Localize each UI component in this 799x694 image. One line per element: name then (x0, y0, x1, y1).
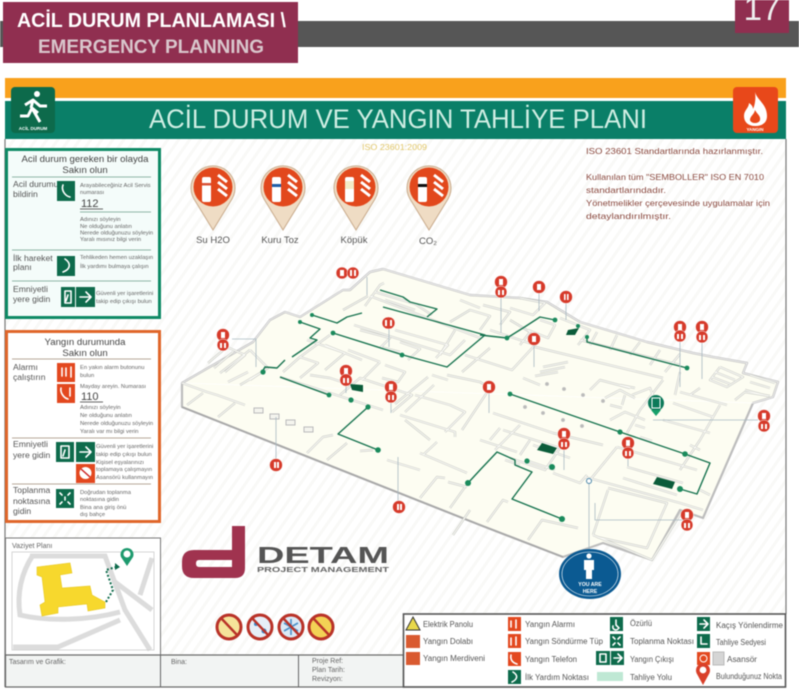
step: raise alarm: Ne olduğunu anlatın (80, 413, 132, 419)
step: report emergency: Acil durumu (13, 179, 59, 189)
step: go to safety (13, 284, 153, 307)
page number (735, 0, 789, 33)
step: raise alarm: Yaralı var mı bilgi verin (80, 429, 139, 435)
legend column 4: Bulunduğunuz Nokta (716, 672, 782, 681)
header title block (3, 2, 298, 63)
title block (6, 655, 404, 687)
step: raise alarm: bulun (80, 373, 94, 379)
you are here marker: YOU ARE (578, 582, 602, 588)
step: first response (13, 253, 153, 276)
step: go to safety: yere gidin (13, 294, 50, 304)
step: assembly point: gidin (13, 506, 31, 516)
step: go to safety: Güvenli yer işaretlerini (96, 444, 153, 450)
icon: emergency exit runner (11, 87, 55, 133)
step: first response: İlk hareket (13, 253, 53, 263)
route to assembly (106, 567, 116, 602)
step: assembly point: Toplanma (13, 485, 50, 495)
legend column 4: Tahliye Sedyesi (716, 638, 766, 647)
extinguisher pin: water (191, 166, 235, 246)
step: go to safety: Emniyetli (13, 284, 48, 294)
divider (12, 177, 151, 281)
you are here marker: HERE (583, 589, 598, 595)
prohibition signs (217, 615, 333, 639)
header title block: EMERGENCY PLANNING (38, 37, 264, 58)
marker leader lines (232, 277, 758, 550)
standards note: Yönetmelikler çerçevesinde uygulamalar için (586, 199, 770, 208)
step: go to safety: Asansörü kullanmayın (96, 475, 153, 481)
legend column 3: Özürlü (630, 619, 652, 628)
step: raise alarm: çalıştırın (13, 372, 46, 382)
assembly pin (120, 548, 133, 566)
green title band (5, 101, 786, 139)
step: report emergency: Nerede olduğunuzu söyleyin (80, 230, 153, 236)
evacuation routes (260, 290, 710, 522)
legend column 1: Elektrik Panolu (423, 620, 473, 629)
you are here marker (559, 478, 621, 599)
step: report emergency: Arayabileceğiniz Acil Servis (80, 183, 151, 189)
main building (37, 563, 105, 616)
divider (12, 359, 151, 484)
title block: Proje Ref: (312, 658, 343, 665)
emergency heading: Sakın olun (62, 165, 108, 176)
legend column 2: Yangın Söndürme Tüp (525, 637, 604, 646)
legend column 1: Yangın Dolabı (423, 637, 473, 646)
legend column 1 (406, 617, 485, 665)
step: report emergency (13, 179, 153, 243)
fire heading: Yangın durumunda (45, 337, 126, 348)
step: first response: İlk yardımı bulmaya çalışın (80, 263, 149, 270)
step: report emergency: 112 (81, 198, 99, 210)
building outline (182, 269, 778, 560)
step: assembly point: Doğrudan toplanma (80, 490, 132, 496)
step: go to safety: toplamaya çalışmayın (96, 467, 152, 473)
legend column 2 (508, 617, 604, 684)
title block: Plan Tarih: (312, 667, 345, 674)
step: report emergency: Yaralı mısınız bilgi verin (80, 237, 141, 243)
fire markers (216, 267, 770, 531)
legend column 3: Tahliye Yolu (630, 673, 672, 682)
panel: site plan (6, 538, 160, 655)
step: assembly point: dış bahçe (80, 512, 105, 518)
exit marker (648, 395, 664, 416)
logo: DETAM: PROJECT MANAGEMENT (257, 565, 389, 574)
extinguisher pin: water: Su H2O (196, 235, 230, 246)
title block: Revizyon: (312, 676, 343, 683)
legend column 3 (596, 617, 694, 682)
title block: Tasarım ve Grafik: (9, 659, 66, 666)
extinguisher pin: dry powder (261, 166, 305, 246)
floor plan (182, 267, 778, 560)
dark green zones (350, 328, 675, 489)
step: raise alarm: Adınızı söyleyin (80, 405, 121, 411)
page header bar (0, 21, 799, 47)
orange band (5, 78, 786, 98)
legend column 3: Toplanma Noktası (630, 637, 694, 646)
fire heading: Sakın olun (62, 348, 108, 359)
step: assembly point: noktasına (13, 496, 50, 506)
emergency heading (22, 154, 149, 176)
legend column 4: Asansör (727, 655, 757, 664)
step: report emergency: numarası (80, 190, 105, 196)
standards note: standartlarındadır. (586, 186, 666, 195)
icon: fire (733, 87, 778, 133)
step: raise alarm (13, 362, 153, 435)
fire heading (45, 337, 126, 359)
step: go to safety: Güvenli yer işaretlerini (96, 291, 153, 297)
icon: emergency exit runner: ACİL DURUM (19, 125, 47, 131)
logo: DETAM: DETAM (257, 542, 389, 568)
extinguisher pin: CO2 (407, 166, 451, 247)
step: raise alarm: Nerede olduğunuzu söyleyin (80, 421, 153, 427)
legend column 4: Kaçış Yönlendirme (716, 621, 784, 630)
extinguisher pin: foam: Köpük (341, 235, 368, 246)
step: go to safety: Kişisel eşyalarınızı (96, 460, 144, 466)
title block: Bina: (171, 659, 187, 666)
panel: fire instructions (6, 332, 160, 522)
step: raise alarm: En yakın alarm butonunu (80, 365, 144, 371)
panel: emergency instructions (6, 150, 160, 318)
step: go to safety: Emniyetli (13, 439, 48, 449)
standards note: ISO 23601 Standartlarında hazırlanmıştır. (586, 147, 763, 156)
step: go to safety: takip edip çıkışı bulun (96, 299, 152, 305)
interior walls (182, 283, 775, 560)
columns (254, 383, 604, 432)
standard code: ISO 23601:2009 (362, 143, 428, 152)
standards note: Kullanılan tüm "SEMBOLLER" ISO EN 7010 (586, 173, 764, 182)
header title block: ACİL DURUM PLANLAMASI \ (17, 9, 286, 32)
step: report emergency: Adınızı söyleyin (80, 217, 121, 223)
legend column 1: Yangın Merdiveni (423, 654, 485, 663)
step: report emergency: Ne olduğunu anlatın (80, 224, 132, 230)
poster title: ACİL DURUM VE YANGIN TAHLİYE PLANI (149, 103, 647, 134)
emergency heading: Acil durum gereken bir olayda (22, 154, 149, 165)
site plan label: Vaziyet Planı (12, 543, 52, 550)
step: go to safety (13, 439, 153, 483)
step: report emergency: bildirin (13, 189, 38, 199)
legend (404, 614, 786, 687)
marker glyphs (220, 270, 767, 528)
extinguisher pin: dry powder: Kuru Toz (261, 235, 299, 246)
step: raise alarm: Alarmı (13, 362, 38, 372)
extinguisher pin: CO2: CO₂ (419, 236, 437, 247)
step: first response: planı (13, 262, 32, 272)
site map roads (13, 555, 152, 650)
step: go to safety: yere gidin (13, 450, 50, 460)
legend column 3: Yangın Çıkışı (630, 655, 674, 664)
standards note (586, 147, 770, 221)
step: raise alarm: 110 (81, 391, 99, 403)
logo: DETAM (182, 526, 389, 578)
step: raise alarm: Mayday areyin. Numarası (80, 384, 146, 390)
legend column 2: Yangın Alarmı (525, 620, 575, 629)
legend column 4 (696, 617, 784, 685)
icon: fire: YANGIN (746, 127, 764, 132)
step: go to safety: takip edip çıkışı bulun (96, 452, 152, 458)
step: first response: Tehlikeden hemen uzaklaşın (80, 255, 153, 261)
legend column 2: Yangın Telefon (525, 655, 577, 664)
standards note: detaylandırılmıştır. (586, 212, 671, 221)
step: assembly point (13, 485, 132, 518)
extinguisher pin: foam (334, 166, 378, 246)
step: assembly point: Bina ana giriş önü (80, 505, 126, 511)
legend column 2: İlk Yardım Noktası (525, 673, 589, 682)
step: assembly point: noktasına gidin (80, 497, 119, 503)
